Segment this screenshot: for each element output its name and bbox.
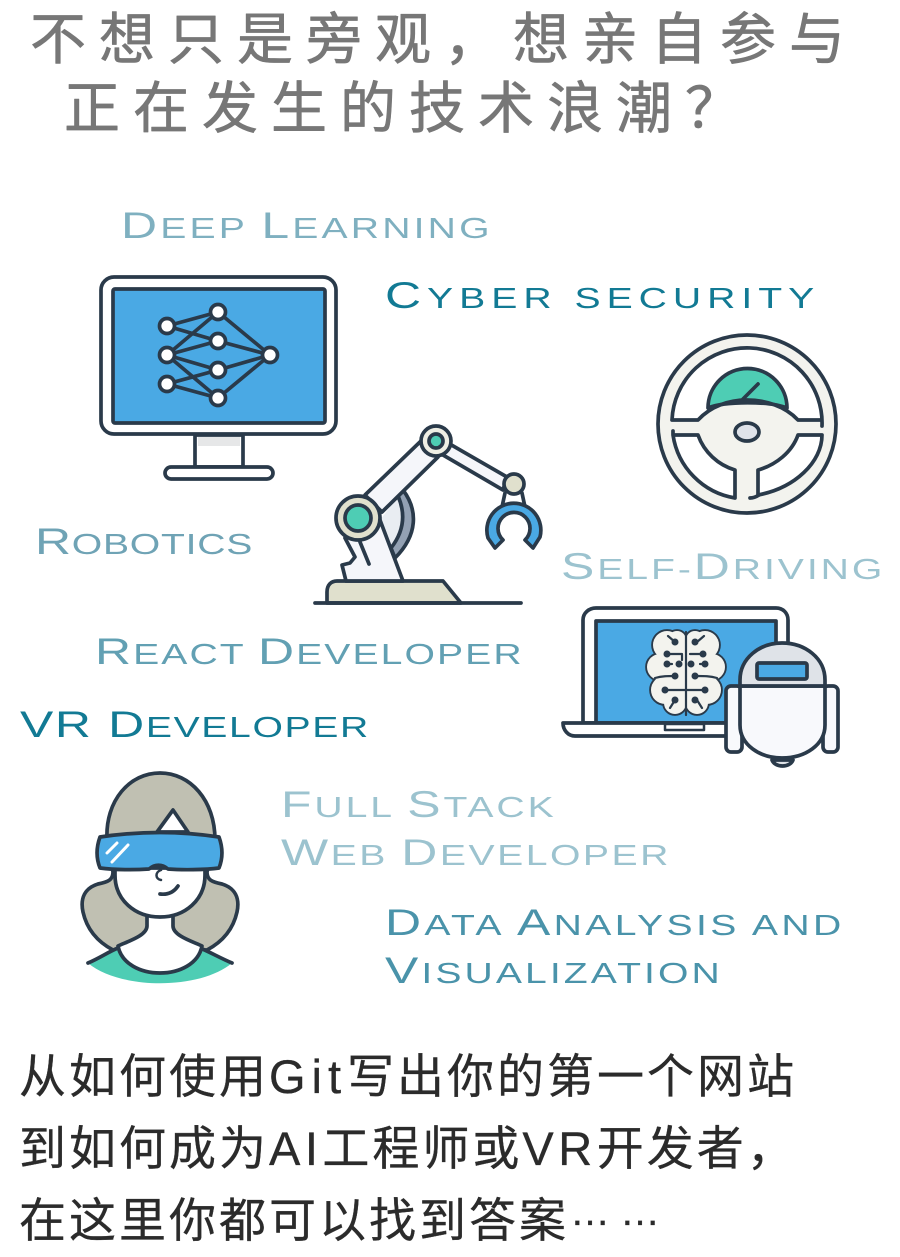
- label: Cyber security: CYBER SECURITY: [385, 275, 814, 316]
- label: Deep Learning: DEEP LEARNING: [121, 205, 490, 246]
- label: VR Developer: VR DEVELOPER: [20, 704, 368, 745]
- body text: 从如何使用Git写出你的第一个网站: [19, 1050, 797, 1103]
- icon: laptop with brain and robot: [563, 608, 838, 766]
- label: Full Stack Web Developer: FULL STACK: [281, 784, 554, 825]
- label: Full Stack Web Developer: WEB DEVELOPER: [281, 832, 668, 873]
- label: Data Analysis and Visualization: VISUALIZATION: [385, 950, 720, 991]
- body text: …: [570, 1190, 610, 1234]
- body text: …: [620, 1190, 660, 1234]
- robot: [726, 643, 838, 766]
- label: Data Analysis and Visualization: DATA ANALYSIS AND: [385, 902, 841, 943]
- label: Data Analysis and Visualization: [385, 902, 841, 991]
- label: Self-Driving: SELF-DRIVING: [561, 546, 882, 587]
- title: 正在发生的技术浪潮？: [64, 64, 754, 145]
- body text: 到如何成为AI工程师或VR开发者，: [19, 1122, 797, 1175]
- icon: monitor with neural network: [101, 277, 336, 479]
- title: [30, 0, 858, 145]
- label: Full Stack Web Developer: [281, 784, 668, 873]
- icon: woman wearing VR headset: [82, 773, 238, 983]
- icon: steering wheel: [658, 335, 836, 513]
- body text: 在这里你都可以找到答案: [19, 1194, 569, 1247]
- label: React Developer: REACT DEVELOPER: [95, 631, 522, 672]
- icon: robotic arm: [315, 426, 541, 603]
- brain: [647, 631, 725, 715]
- body text: [19, 1050, 797, 1247]
- label: Robotics: ROBOTICS: [35, 521, 252, 562]
